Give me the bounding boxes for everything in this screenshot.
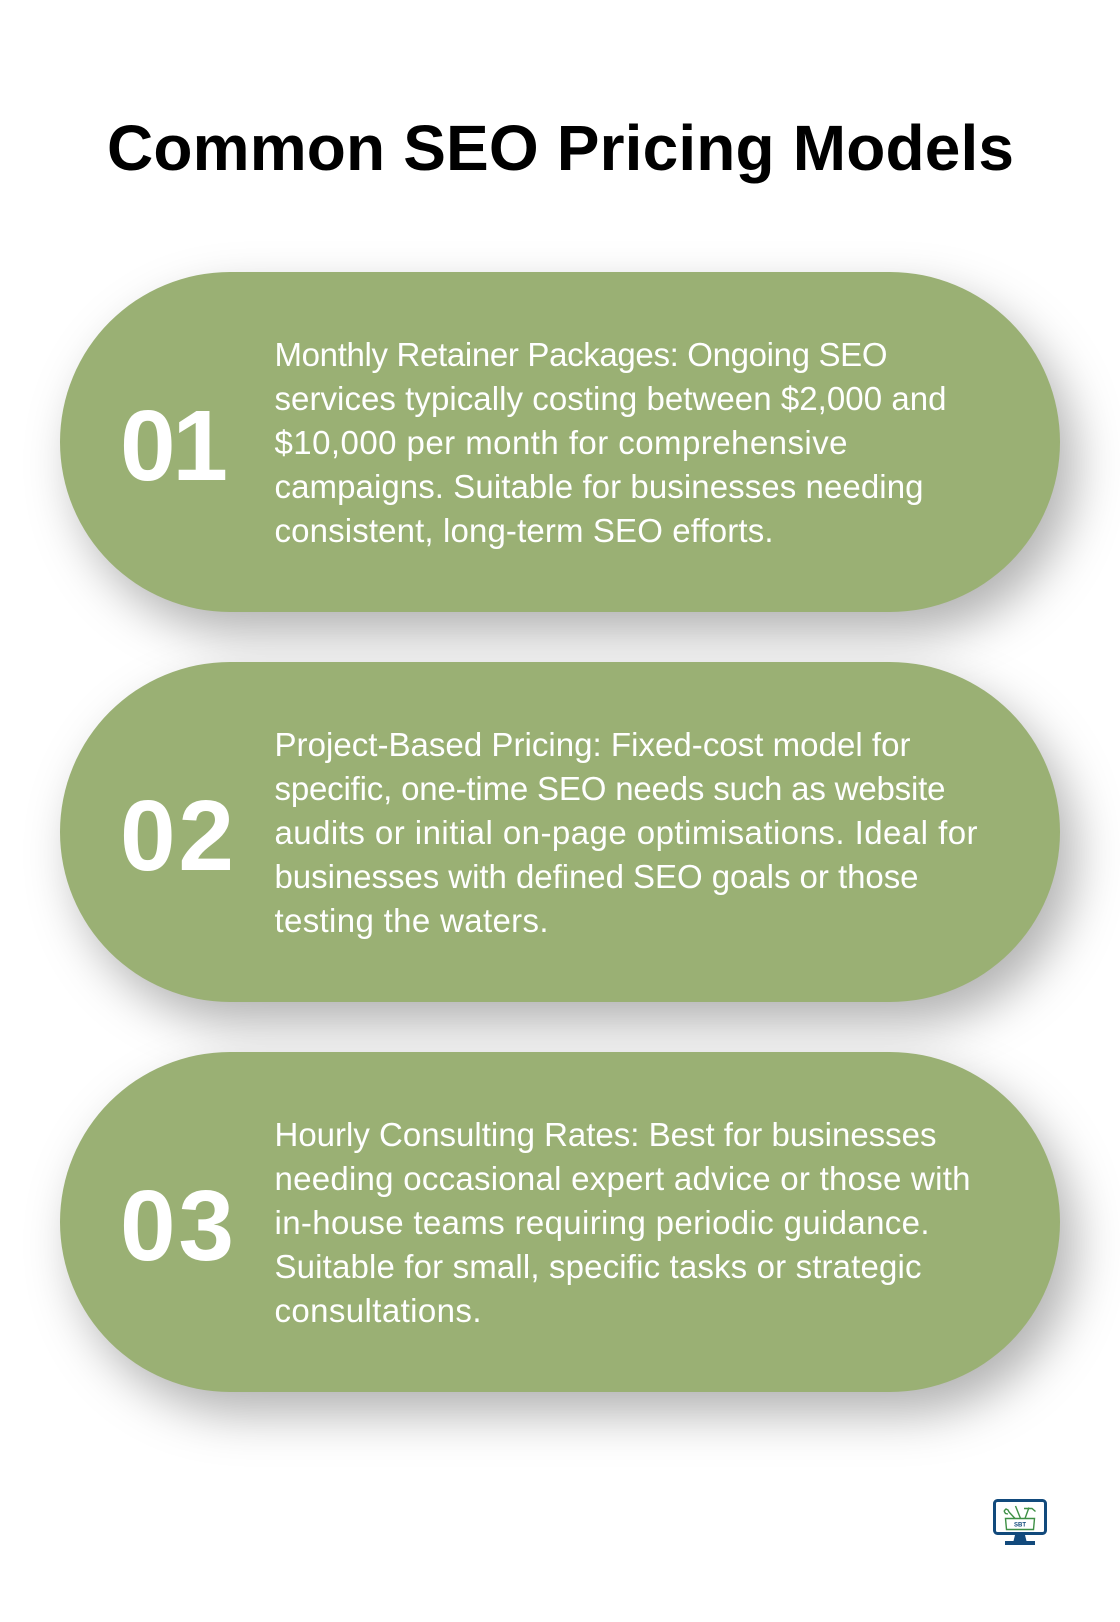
text block 03: Suitable for small, specific tasks or strategic <box>274 1248 922 1285</box>
text block 02: specific, one-time SEO needs such as website <box>274 770 946 807</box>
text block 02: businesses with defined SEO goals or those <box>274 858 918 895</box>
panel: project-based pricing <box>60 662 1060 1002</box>
text block 03: in-house teams requiring periodic guidance. <box>274 1204 930 1241</box>
text block 03 <box>274 1116 970 1329</box>
text block 01: Monthly Retainer Packages: Ongoing SEO <box>274 336 888 373</box>
panel: hourly consulting rates <box>60 1052 1060 1392</box>
card background 03 <box>60 1052 1060 1392</box>
number 02: 02 <box>120 780 234 892</box>
number 03: 03 <box>120 1170 234 1282</box>
card background 01 <box>60 272 1060 612</box>
text block 01: services typically costing between $2,000 and <box>274 380 946 417</box>
number 01: 01 <box>120 390 228 502</box>
title: Common SEO Pricing Models <box>107 112 1014 184</box>
text block 02: testing the waters. <box>274 902 548 939</box>
text block 03: needing occasional expert advice or those with <box>274 1160 970 1197</box>
text block 02: audits or initial on-page optimisations. Ideal for <box>274 814 978 851</box>
panel: monthly retainer packages <box>60 272 1060 612</box>
card background 02 <box>60 662 1060 1002</box>
icon: monitor with toolbox logo <box>994 1500 1046 1545</box>
text block 01: $10,000 per month for comprehensive <box>274 424 848 461</box>
text block 02 <box>274 726 978 939</box>
text block 01 <box>274 336 946 549</box>
text block 01: consistent, long-term SEO efforts. <box>274 512 774 549</box>
text block 01: campaigns. Suitable for businesses needing <box>274 468 924 505</box>
icon: monitor with toolbox logo: SBT <box>1014 1522 1026 1528</box>
text block 02: Project-Based Pricing: Fixed-cost model for <box>274 726 910 763</box>
text block 03: consultations. <box>274 1292 482 1329</box>
text block 03: Hourly Consulting Rates: Best for businesses <box>274 1116 936 1153</box>
